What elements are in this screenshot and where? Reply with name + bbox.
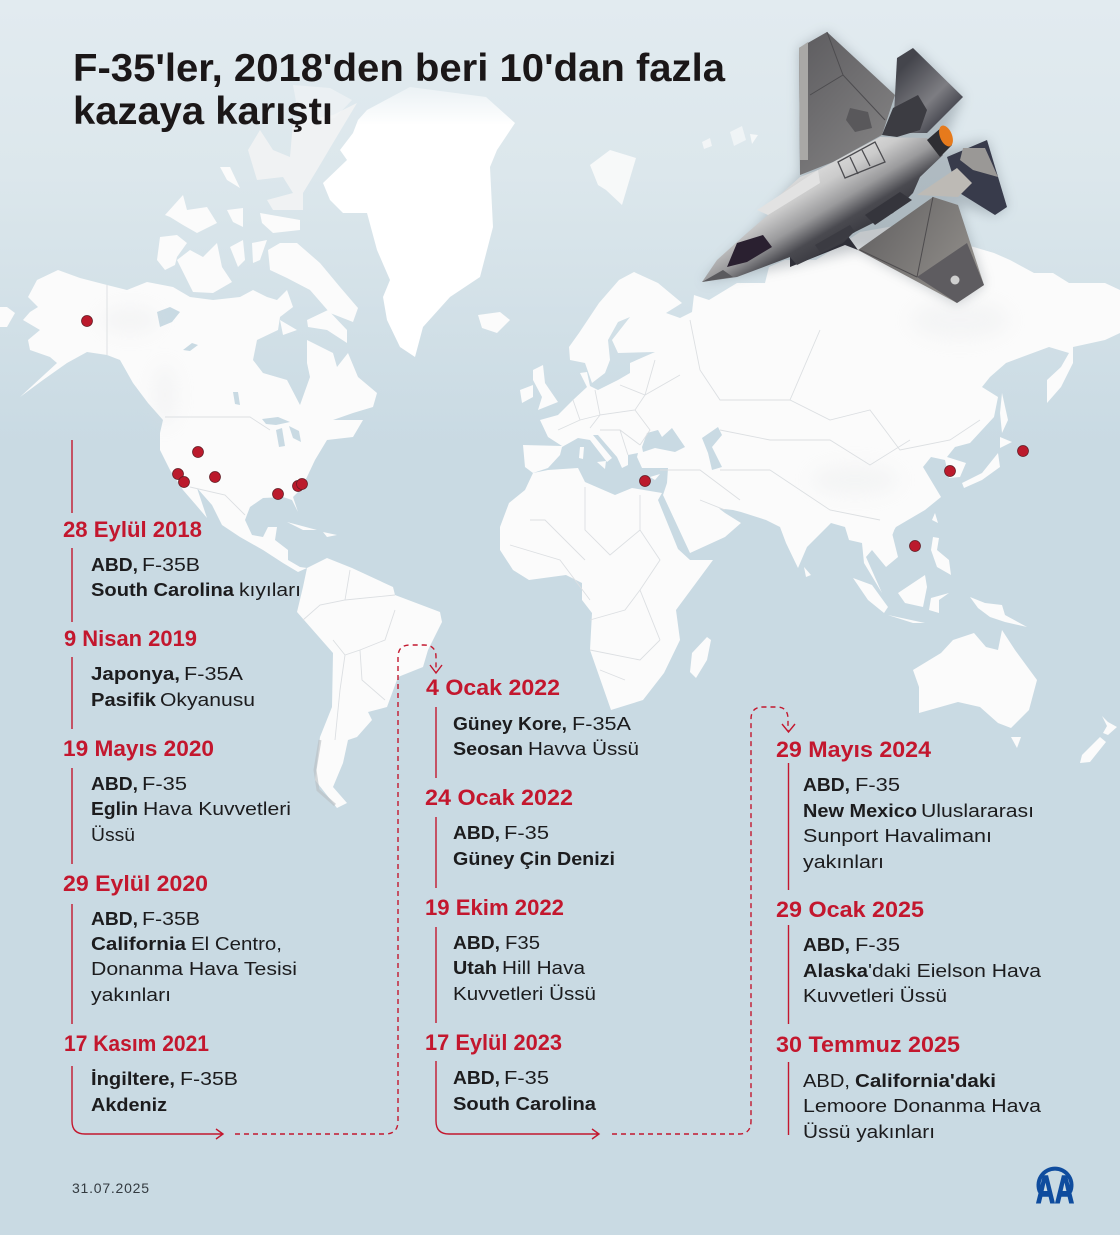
event: 9 Nisan 2019: F-35A	[184, 664, 243, 684]
event: 19 Ekim 2022: Kuvvetleri Üssü	[453, 984, 596, 1004]
event: 4 Ocak 2022: Güney Kore,	[453, 714, 567, 734]
icon: Anadolu Agency logo: AA	[1036, 1169, 1074, 1212]
Eurasia	[523, 225, 1120, 593]
event: 29 Eylül 2020	[63, 871, 297, 1005]
event: 29 Eylül 2020: Donanma Hava Tesisi	[91, 959, 297, 979]
timeline column 3 connector	[788, 763, 790, 1135]
event: 29 Mayıs 2024: F-35	[855, 775, 900, 795]
event: 17 Eylül 2023: F-35	[504, 1068, 549, 1088]
event: 29 Mayıs 2024: New Mexico	[803, 801, 917, 821]
country borders	[107, 285, 980, 740]
event: 19 Ekim 2022: 19 Ekim 2022	[425, 895, 564, 920]
event: 9 Nisan 2019: Pasifik	[91, 690, 157, 710]
F-35 jet illustration	[702, 32, 1007, 303]
event: 17 Kasım 2021	[64, 1031, 238, 1115]
event: 29 Ocak 2025: 'daki Eielson Hava	[868, 961, 1042, 981]
event: 17 Eylül 2023: South Carolina	[453, 1094, 597, 1114]
event: 30 Temmuz 2025: 30 Temmuz 2025	[776, 1032, 960, 1057]
event: 29 Ocak 2025: Alaska	[803, 961, 869, 981]
timeline column 1 connector	[72, 440, 442, 1139]
event: 29 Eylül 2020: ABD,	[91, 909, 138, 929]
event: 17 Kasım 2021: İngiltere,	[91, 1069, 175, 1089]
event: 4 Ocak 2022: Havva Üssü	[528, 739, 639, 759]
title: kazaya karıştı	[73, 90, 333, 133]
event: 24 Ocak 2022: F-35	[504, 823, 549, 843]
title	[73, 47, 725, 133]
event: 30 Temmuz 2025: ABD,	[803, 1071, 850, 1091]
event: 9 Nisan 2019	[64, 626, 255, 710]
event: 29 Eylül 2020: yakınları	[91, 985, 171, 1005]
event: 19 Mayıs 2020: 19 Mayıs 2020	[63, 736, 214, 761]
event: 17 Eylül 2023: ABD,	[453, 1068, 500, 1088]
event: 19 Mayıs 2020	[63, 736, 291, 845]
title: F-35'ler, 2018'den beri 10'dan fazla	[73, 47, 725, 90]
event: 17 Kasım 2021: Akdeniz	[91, 1095, 167, 1115]
event: 4 Ocak 2022: 4 Ocak 2022	[426, 675, 560, 700]
event: 9 Nisan 2019: 9 Nisan 2019	[64, 626, 197, 651]
event: 29 Mayıs 2024: Sunport Havalimanı	[803, 826, 992, 846]
event: 29 Mayıs 2024: 29 Mayıs 2024	[776, 737, 932, 762]
incident dots	[82, 316, 1028, 552]
event: 29 Ocak 2025: ABD,	[803, 935, 850, 955]
event: 19 Mayıs 2020: Eglin	[91, 799, 138, 819]
event: 29 Ocak 2025	[776, 897, 1042, 1006]
event: 4 Ocak 2022: F-35A	[572, 714, 631, 734]
event: 28 Eylül 2018: 28 Eylül 2018	[63, 517, 202, 542]
North and Central America	[20, 270, 377, 572]
event: 29 Eylül 2020: California	[91, 934, 187, 954]
event: 29 Ocak 2025: F-35	[855, 935, 900, 955]
event: 29 Ocak 2025: 29 Ocak 2025	[776, 897, 924, 922]
event: 30 Temmuz 2025	[776, 1032, 1042, 1142]
event: 17 Kasım 2021: F-35B	[180, 1069, 238, 1089]
event: 9 Nisan 2019: Japonya,	[91, 664, 180, 684]
event: 17 Eylül 2023	[425, 1030, 597, 1114]
event: 28 Eylül 2018: F-35B	[142, 555, 200, 575]
event: 19 Mayıs 2020: Üssü	[91, 825, 135, 845]
event: 17 Kasım 2021: 17 Kasım 2021	[64, 1031, 209, 1056]
North American lakes	[157, 307, 301, 447]
Iceland and Svalbard	[478, 126, 758, 333]
date stamp: 31.07.2025	[72, 1180, 149, 1196]
event: 28 Eylül 2018: kıyıları	[239, 580, 301, 600]
Arctic islands	[0, 85, 358, 537]
event: 4 Ocak 2022: Seosan	[453, 739, 523, 759]
event: 19 Ekim 2022: F35	[505, 933, 540, 953]
event: 29 Mayıs 2024: ABD,	[803, 775, 850, 795]
event: 4 Ocak 2022	[426, 675, 639, 759]
event: 29 Mayıs 2024: yakınları	[803, 852, 884, 872]
event: 29 Eylül 2020: F-35B	[142, 909, 200, 929]
event: 9 Nisan 2019: Okyanusu	[160, 690, 255, 710]
event: 29 Mayıs 2024	[776, 737, 1034, 872]
event: 19 Ekim 2022	[425, 895, 596, 1004]
event: 24 Ocak 2022: Güney Çin Denizi	[453, 849, 615, 869]
event: 17 Eylül 2023: 17 Eylül 2023	[425, 1030, 562, 1055]
Africa	[500, 468, 713, 710]
event: 19 Ekim 2022: Hill Hava	[502, 958, 586, 978]
world map	[0, 85, 1120, 808]
South America	[297, 558, 442, 808]
event: 19 Mayıs 2020: Hava Kuvvetleri	[143, 799, 291, 819]
event: 19 Mayıs 2020: F-35	[142, 774, 187, 794]
relief shading	[100, 300, 1010, 496]
islands of Europe and Asia	[520, 365, 1027, 678]
event: 24 Ocak 2022: 24 Ocak 2022	[425, 785, 573, 810]
event: 28 Eylül 2018: South Carolina	[91, 580, 235, 600]
Australia and New Zealand	[913, 630, 1117, 763]
event: 30 Temmuz 2025: California'daki	[855, 1071, 996, 1091]
event: 28 Eylül 2018: ABD,	[91, 555, 138, 575]
event: 28 Eylül 2018	[63, 517, 301, 600]
event: 29 Eylül 2020: El Centro,	[191, 934, 282, 954]
event: 29 Mayıs 2024: Uluslararası	[921, 801, 1034, 821]
inland seas	[642, 427, 722, 470]
event: 24 Ocak 2022	[425, 785, 615, 869]
event: 19 Ekim 2022: Utah	[453, 958, 497, 978]
Greenland	[323, 87, 515, 357]
event: 29 Eylül 2020: 29 Eylül 2020	[63, 871, 208, 896]
event: 30 Temmuz 2025: Üssü yakınları	[803, 1122, 935, 1142]
event: 24 Ocak 2022: ABD,	[453, 823, 500, 843]
timeline column 2 connector	[436, 707, 795, 1139]
event: 19 Mayıs 2020: ABD,	[91, 774, 138, 794]
event: 19 Ekim 2022: ABD,	[453, 933, 500, 953]
event: 29 Ocak 2025: Kuvvetleri Üssü	[803, 986, 947, 1006]
event: 30 Temmuz 2025: Lemoore Donanma Hava	[803, 1096, 1042, 1116]
